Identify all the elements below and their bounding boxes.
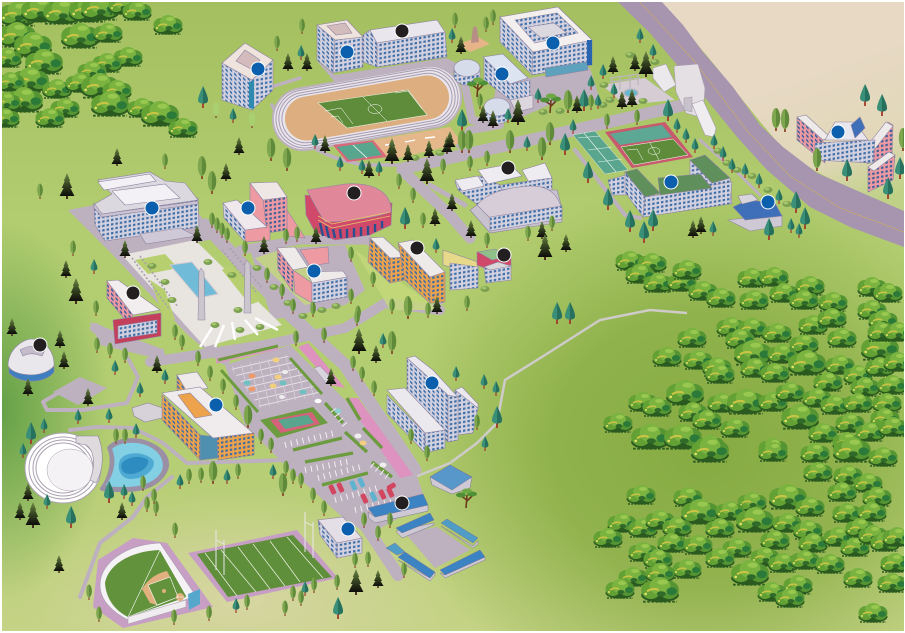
- tennis and tan courts: [333, 127, 462, 162]
- building: large quadrangle dorm: [500, 7, 592, 77]
- building: orange hall: [368, 237, 445, 303]
- rugby field: [188, 512, 338, 602]
- map markers: black: [33, 24, 515, 510]
- small bushes: [252, 52, 792, 319]
- paved areas: [53, 58, 675, 568]
- building: blue roof hall: [728, 194, 782, 231]
- building: gymnasium: [455, 163, 562, 233]
- pergola and fountain: [610, 74, 640, 97]
- thin service path: [415, 310, 687, 477]
- sandy area top right: [655, 2, 904, 225]
- plaza with pool and obelisks: [122, 240, 282, 347]
- blue sheds: [368, 465, 485, 581]
- building: tower left: [222, 43, 273, 110]
- forest: top left: [0, 0, 198, 138]
- gate monument: [653, 64, 716, 137]
- amphitheatre: [25, 433, 102, 503]
- building: library: [93, 172, 199, 244]
- track and soccer stadium: [272, 66, 462, 152]
- observatory dome: [8, 339, 54, 381]
- building: white admin office: [318, 517, 362, 558]
- baseball field: [93, 538, 213, 628]
- building: red lab block: [107, 280, 161, 344]
- building: orange main hall: [132, 372, 254, 460]
- road network: [43, 68, 760, 597]
- parking lot and strips: [216, 343, 413, 510]
- building: long teaching block: [608, 155, 732, 217]
- lawns: [255, 250, 440, 310]
- parked cars: [244, 358, 396, 504]
- building: small labs: [443, 249, 511, 290]
- map markers: blue: [145, 36, 845, 536]
- forest: right side: [594, 251, 905, 622]
- pagoda monument: [463, 26, 490, 52]
- building: pink science hall: [223, 182, 305, 242]
- building: arena: [305, 184, 392, 240]
- sports courts: [573, 122, 693, 174]
- building: pink department: [277, 247, 347, 303]
- building: hospital: [387, 356, 478, 453]
- central sports court: [260, 407, 328, 438]
- building: round drum halls: [454, 54, 533, 124]
- lake: [100, 438, 169, 492]
- main highway: [618, 2, 904, 247]
- building: right residence complex: [797, 115, 895, 192]
- building: twin dorm: [317, 20, 447, 73]
